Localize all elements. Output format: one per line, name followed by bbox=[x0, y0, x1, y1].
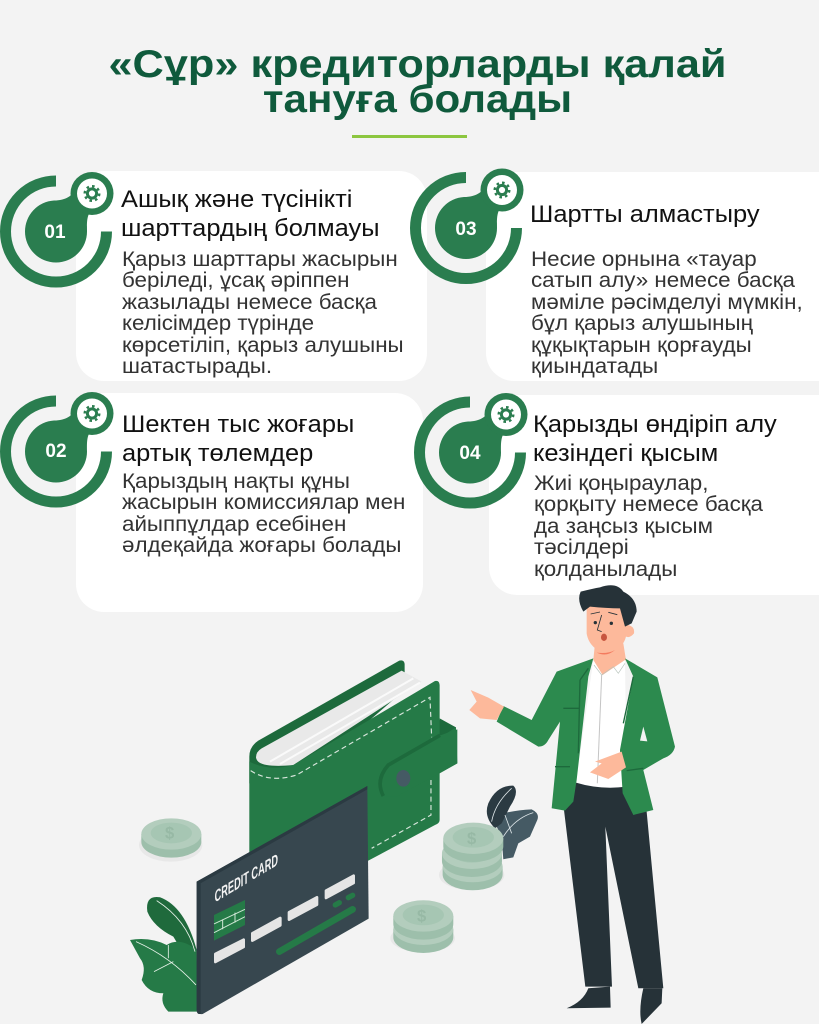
heading 01 bbox=[121, 186, 379, 242]
body 01: шатастырады. bbox=[122, 355, 272, 378]
panel: card 04 bbox=[489, 395, 819, 595]
body 03: мәміле рәсімделуі мүмкін, bbox=[531, 291, 803, 314]
body 04: қорқыту немесе басқа bbox=[534, 493, 763, 516]
jacket bbox=[497, 658, 593, 811]
body 03: құқықтарын қорғауды bbox=[531, 334, 752, 357]
heading 02: Шектен тыс жоғары bbox=[122, 411, 354, 438]
body 01: көрсетіліп, қарыз алушыны bbox=[122, 334, 404, 357]
shirt bbox=[576, 660, 627, 788]
hand pointing bbox=[469, 690, 504, 720]
badge 04 bbox=[420, 393, 528, 503]
icon: coin left: $ bbox=[165, 824, 175, 843]
body 03 bbox=[531, 248, 803, 378]
icon: wallet bbox=[249, 660, 457, 863]
body 01: келісімдер түрінде bbox=[122, 312, 314, 335]
shoes bbox=[567, 987, 662, 1024]
panel: card 02 bbox=[76, 393, 423, 612]
body 01: беріледі, ұсақ әріппен bbox=[122, 269, 350, 292]
badge 02: 02 bbox=[45, 441, 67, 462]
body 02 bbox=[122, 470, 405, 557]
neck bbox=[593, 643, 626, 677]
coin shadows bbox=[139, 828, 504, 952]
heading 03: Шартты алмастыру bbox=[530, 201, 760, 228]
icon: coin pair: $ bbox=[417, 906, 427, 925]
badge 02 bbox=[6, 392, 114, 502]
icon: dark leaves bbox=[487, 786, 538, 859]
badge 04: 04 bbox=[459, 443, 481, 464]
body 04: да заңсыз қысым bbox=[534, 515, 713, 538]
illustration: wallet, card and coins bbox=[130, 660, 538, 1014]
icon: coin left bbox=[141, 818, 201, 858]
body 03: қиындатады bbox=[531, 355, 658, 378]
card label: CREDIT CARD bbox=[215, 850, 278, 906]
icon: coin pair bbox=[393, 900, 453, 953]
face bbox=[587, 603, 634, 653]
icon: green leaves bbox=[130, 897, 198, 1012]
body 02: айыппұлдар есебінен bbox=[122, 513, 346, 536]
badge 03 bbox=[416, 168, 524, 278]
heading 01: Ашық және түсінікті bbox=[121, 186, 352, 213]
badge 01 bbox=[6, 172, 114, 282]
icon: coin stack bbox=[442, 823, 503, 890]
hand on belly bbox=[590, 752, 626, 779]
trousers bbox=[564, 782, 663, 988]
illustration: man in green jacket bbox=[469, 585, 675, 1024]
body 01 bbox=[122, 248, 404, 378]
body 04: қолданылады bbox=[534, 558, 677, 581]
body 04 bbox=[534, 472, 763, 581]
heading 04: Қарызды өндіріп алу bbox=[533, 411, 777, 438]
body 02: әлдеқайда жоғары болады bbox=[122, 534, 401, 557]
title underline bbox=[352, 135, 467, 138]
heading 01: шарттардың болмауы bbox=[121, 215, 379, 242]
title: «Сұр» кредиторларды қалай bbox=[108, 43, 727, 86]
body 01: Қарыз шарттары жасырын bbox=[122, 248, 398, 271]
title: тануға болады bbox=[263, 78, 572, 121]
heading 02 bbox=[122, 411, 354, 467]
panel: card 03 bbox=[486, 172, 819, 381]
body 03: бұл қарыз алушының bbox=[531, 312, 753, 335]
eyes and mouth bbox=[591, 612, 617, 632]
body 03: Несие орнына «тауар bbox=[531, 248, 757, 271]
body 02: Қарыздың нақты құны bbox=[122, 470, 350, 493]
icon: coin stack: $ bbox=[467, 829, 477, 848]
body 04: тәсілдері bbox=[534, 536, 629, 559]
heading 02: артық төлемдер bbox=[122, 440, 313, 467]
icon: credit card bbox=[197, 786, 369, 1014]
hair bbox=[579, 585, 637, 627]
body 03: сатып алу» немесе басқа bbox=[531, 269, 795, 292]
badge 01: 01 bbox=[44, 222, 66, 243]
panel: card 01 bbox=[76, 171, 427, 381]
title bbox=[108, 43, 727, 121]
badge 03: 03 bbox=[455, 219, 477, 240]
heading 04: кезіндегі қысым bbox=[533, 440, 718, 467]
heading 04 bbox=[533, 411, 777, 467]
body 02: жасырын комиссиялар мен bbox=[122, 491, 405, 514]
body 01: жазылады немесе басқа bbox=[122, 291, 377, 314]
body 04: Жиі қоңыраулар, bbox=[534, 472, 708, 495]
